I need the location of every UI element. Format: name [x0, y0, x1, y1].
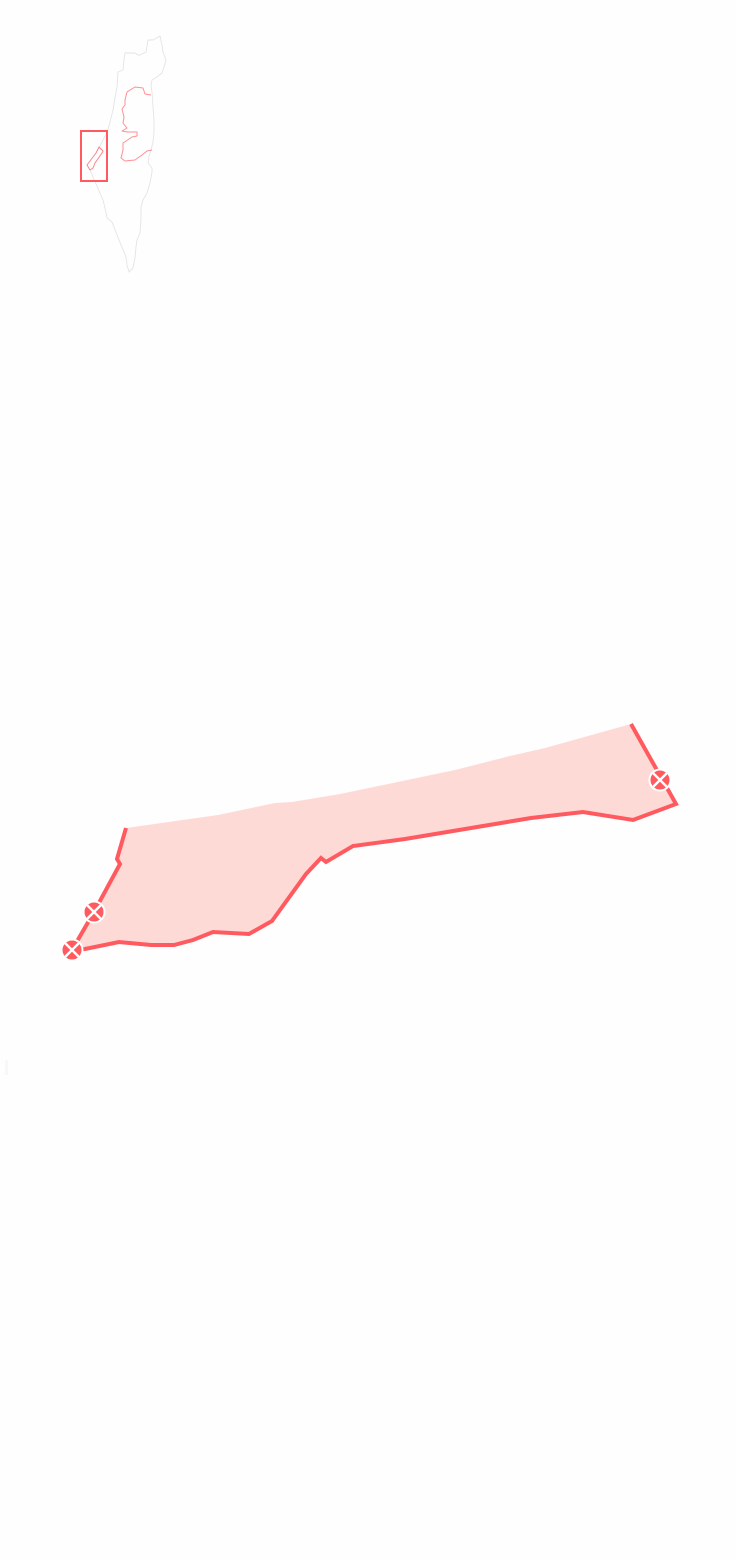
icon: crossing marker west [84, 902, 104, 922]
Gaza Strip map [62, 724, 676, 960]
Gaza territory fill [72, 724, 676, 950]
Gaza border line [72, 724, 676, 950]
locator: country outline [90, 36, 166, 272]
locator: West Bank outline [121, 87, 152, 161]
locator: highlight rectangle [81, 131, 107, 181]
icon: crossing marker south-west [62, 940, 82, 960]
icon: crossing marker east [650, 770, 670, 790]
locator map [81, 36, 166, 272]
locator: Gaza Strip outline [87, 147, 103, 170]
